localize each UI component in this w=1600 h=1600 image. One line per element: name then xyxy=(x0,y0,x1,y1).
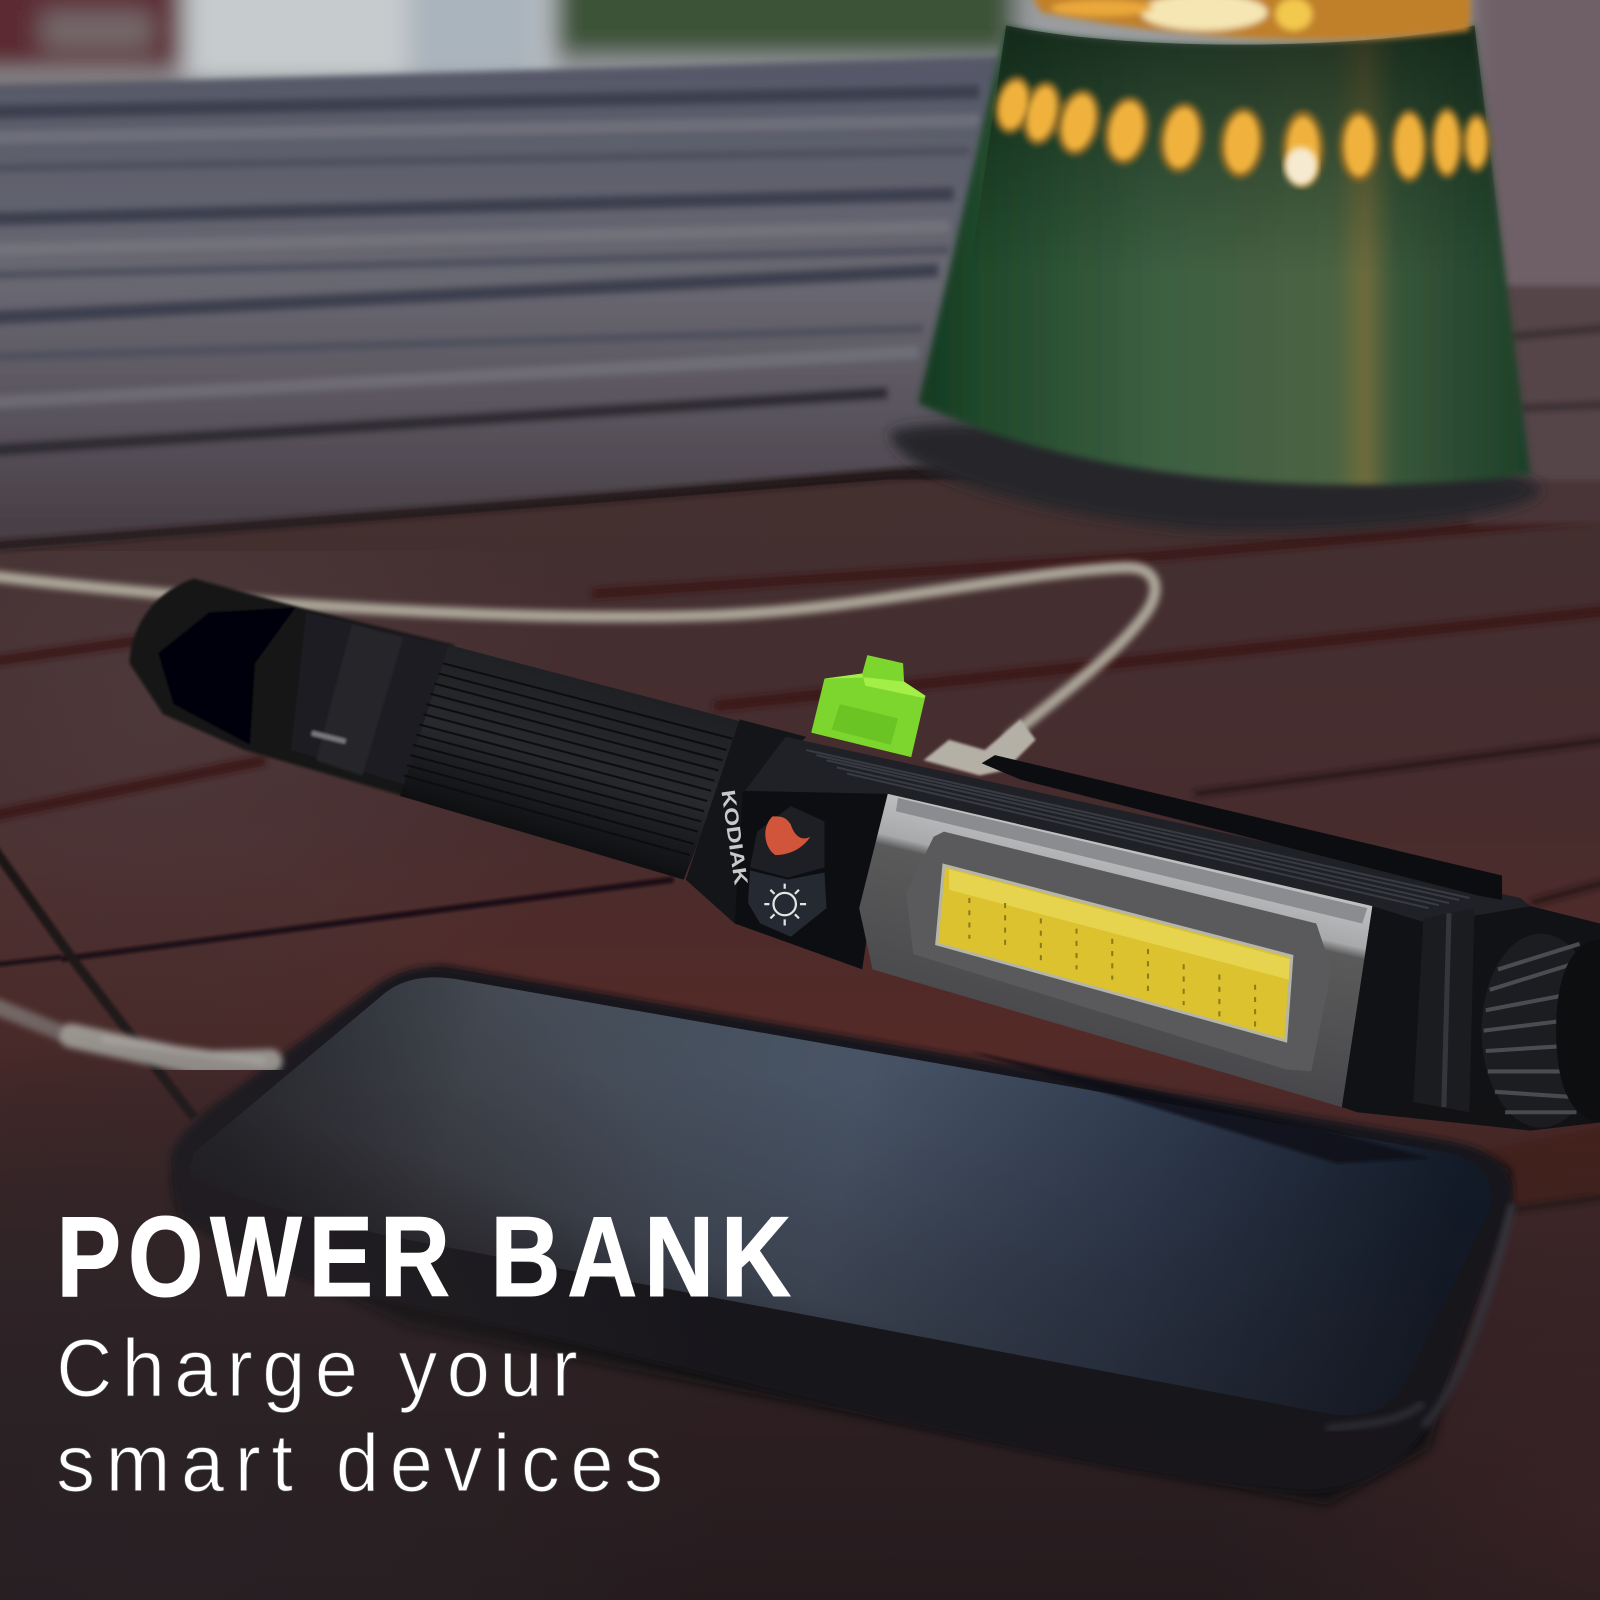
flashlight head xyxy=(130,579,454,796)
background: flat base of the top-right wall xyxy=(1327,0,1600,306)
dark left gradient behind text xyxy=(0,857,724,1600)
ribbed grip xyxy=(400,645,745,880)
usb cable plugged into phone xyxy=(0,1000,270,1063)
subtitle xyxy=(56,1322,663,1508)
green table lamp xyxy=(890,0,1541,532)
clear lens cover xyxy=(859,794,1372,1107)
title: POWER BANK xyxy=(56,1194,791,1321)
lamp body xyxy=(918,26,1531,485)
phone screen xyxy=(189,977,1491,1415)
flashlight xyxy=(130,579,1600,1131)
charging cable behind flashlight xyxy=(0,567,1155,737)
control panel xyxy=(735,791,888,969)
background: blurred scenery at top xyxy=(0,0,1469,92)
phone shadow xyxy=(173,969,1510,1505)
dark gradient behind text xyxy=(0,1071,1600,1600)
work light case top xyxy=(745,737,1531,934)
knurled end cap xyxy=(1482,934,1600,1128)
magnetic clip xyxy=(982,755,1502,900)
icon: sun xyxy=(764,884,806,926)
flashlight tail rings xyxy=(1342,906,1600,1131)
brand label: KODIAK xyxy=(716,788,752,887)
background: wooden table with plank gaps xyxy=(0,469,1600,1600)
phone frame xyxy=(170,967,1513,1492)
smartphone xyxy=(170,967,1513,1505)
green rubber port cover xyxy=(811,655,926,757)
subtitle line 1: Charge your xyxy=(56,1322,578,1413)
background: slats right of the lamp xyxy=(1469,286,1600,524)
subtitle line 2: smart devices xyxy=(56,1417,663,1508)
power button xyxy=(750,806,824,878)
neck xyxy=(686,719,806,923)
usb connector xyxy=(923,719,1036,776)
lamp glowing holes xyxy=(989,72,1491,188)
mode button xyxy=(748,870,827,937)
phone shadow reflection under flashlight xyxy=(969,1051,1429,1163)
yellow COB LED panel xyxy=(937,865,1292,1041)
lamp glowing top xyxy=(1029,0,1471,40)
lamp base xyxy=(890,424,1541,532)
icon: flame xyxy=(765,816,810,855)
background: wooden bench slats xyxy=(0,56,1000,556)
